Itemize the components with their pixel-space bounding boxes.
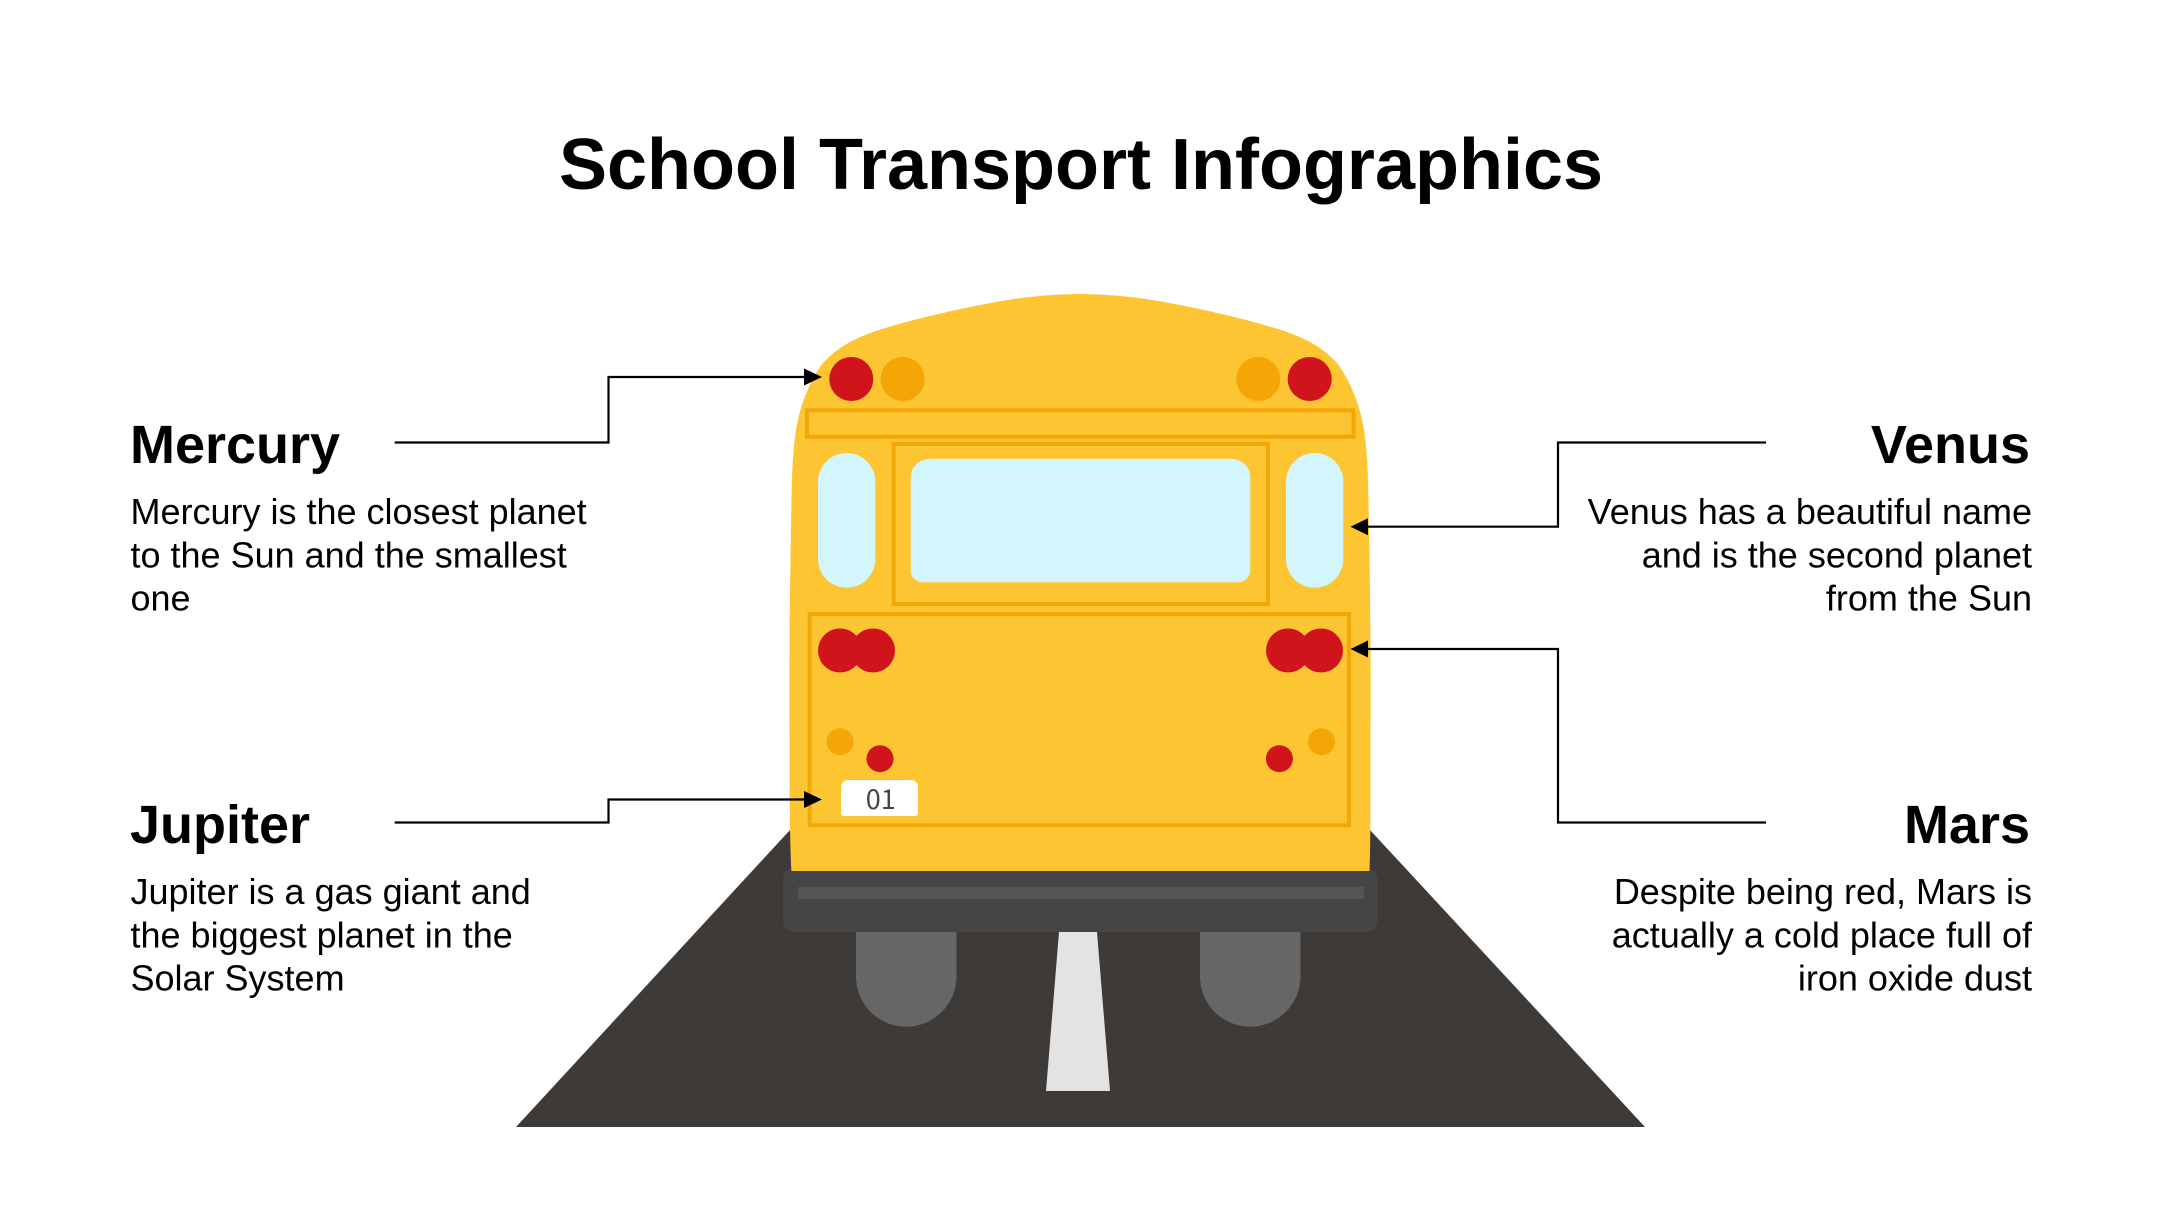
text block: Mars: Despite being red, Mars is bbox=[1614, 871, 2032, 912]
top trim bar bbox=[807, 410, 1354, 437]
school bus bbox=[789, 294, 1371, 871]
text block: Mars bbox=[1612, 795, 2033, 998]
text block: Venus: and is the second planet bbox=[1642, 534, 2032, 576]
text block: Venus bbox=[1588, 415, 2032, 618]
text block: Mercury: one bbox=[130, 578, 191, 618]
rear window bbox=[911, 459, 1250, 582]
text block: Mars: actually a cold place full of bbox=[1612, 914, 2033, 956]
text block: Mercury: Mercury is the closest planet bbox=[130, 491, 587, 532]
text block: Mercury bbox=[130, 415, 587, 618]
wheels bbox=[856, 930, 1300, 1027]
text block: Venus: Venus bbox=[1871, 415, 2030, 475]
text block: Jupiter: Jupiter is a gas giant and bbox=[130, 871, 531, 912]
title: School Transport Infographics bbox=[559, 125, 1603, 205]
arrow: Mars bbox=[1350, 640, 1766, 822]
text block: Mercury: to the Sun and the smallest bbox=[130, 534, 567, 576]
bus body bbox=[789, 294, 1371, 871]
arrow: Venus bbox=[1350, 442, 1766, 535]
rear door frame bbox=[894, 444, 1268, 604]
arrow: Jupiter bbox=[395, 791, 822, 822]
text block: Jupiter bbox=[130, 795, 531, 998]
text block: Mars: Mars bbox=[1904, 795, 2030, 855]
text block: Venus: Venus has a beautiful name bbox=[1588, 491, 2032, 532]
small lights bbox=[826, 728, 1335, 772]
licence plate: 01 bbox=[866, 778, 896, 817]
lane marking bbox=[1046, 932, 1110, 1091]
road bbox=[516, 830, 1645, 1127]
text block: Mercury: Mercury bbox=[130, 415, 340, 475]
roof lights bbox=[829, 357, 1332, 401]
arrow: Mercury bbox=[395, 368, 822, 442]
text block: Mars: iron oxide dust bbox=[1798, 958, 2032, 998]
text block: Jupiter: the biggest planet in the bbox=[130, 914, 513, 956]
text block: Jupiter: Jupiter bbox=[130, 795, 310, 855]
text block: Jupiter: Solar System bbox=[130, 958, 345, 998]
bumper bbox=[783, 868, 1378, 932]
text block: Venus: from the Sun bbox=[1826, 578, 2032, 618]
brake lights bbox=[818, 628, 1343, 672]
licence plate bbox=[841, 778, 918, 817]
lower panel frame bbox=[810, 614, 1349, 825]
side windows bbox=[818, 453, 1343, 588]
